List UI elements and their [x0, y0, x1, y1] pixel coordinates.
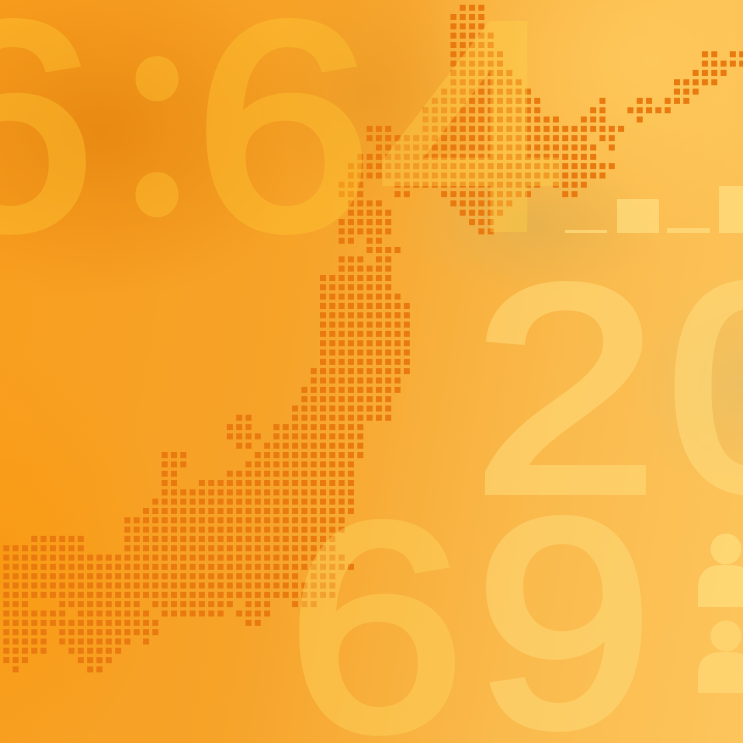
large number: 6:6 [0, 0, 372, 291]
icon: person lower [698, 620, 743, 693]
icon: person upper [698, 534, 743, 607]
large number: 69 [287, 458, 653, 743]
large number: 20: 2 [473, 224, 658, 554]
large number: 20 [473, 223, 743, 554]
bar chart: small pale bars [565, 186, 743, 233]
